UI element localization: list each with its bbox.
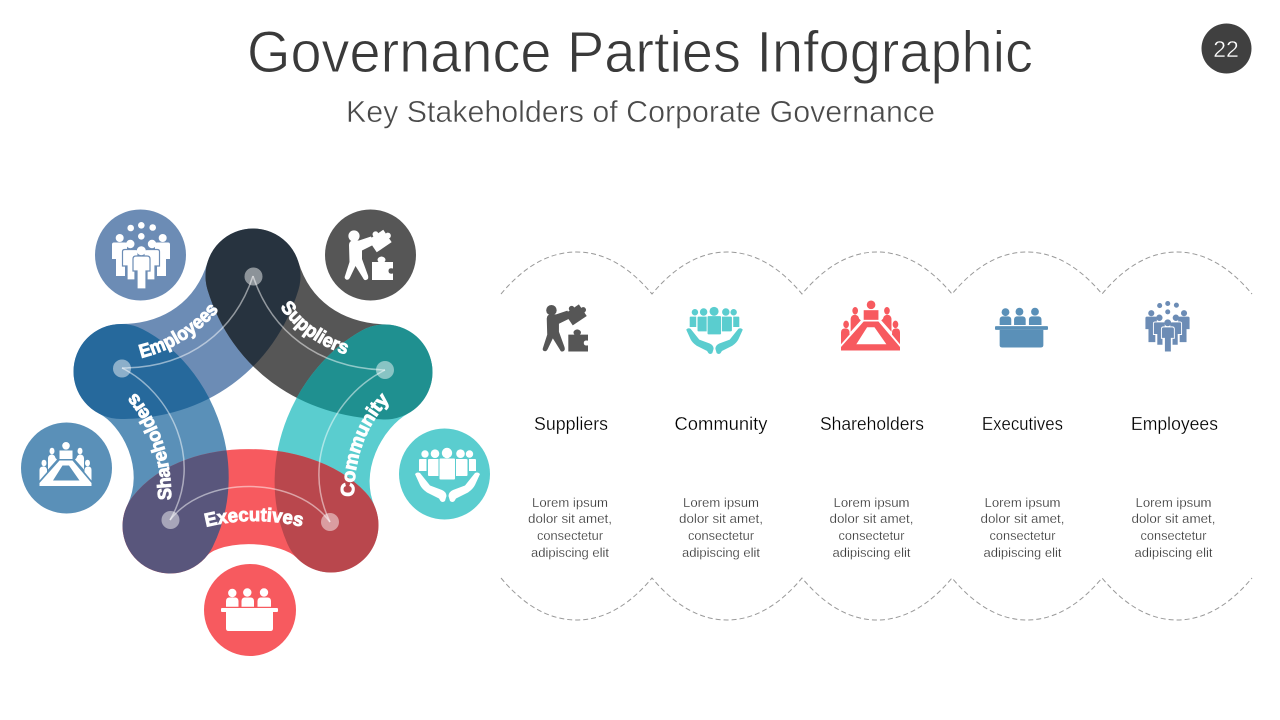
description [1132,495,1216,560]
curved label: Shareholders: Shareholders [128,394,172,500]
subtitle: Key Stakeholders of Corporate Governance [346,94,935,129]
band: employees [121,276,253,372]
icon: meeting table [841,301,900,350]
icon: hands holding people [686,307,743,354]
description: adipiscing elit [531,545,609,560]
description [679,495,763,560]
description: Lorem ipsum [834,495,910,510]
column: executives [980,308,1064,560]
band: executives [170,497,331,526]
overlap: executives and community [322,372,385,525]
description: adipiscing elit [832,545,911,560]
overlap: suppliers and community [322,372,385,525]
description: consectetur [990,528,1056,543]
description: adipiscing elit [984,545,1062,560]
title: Governance Parties Infographic [247,20,1033,85]
curved label: Employees: Employees [138,304,218,358]
curved label: Executives: Executives [204,507,304,528]
page number badge: 22 [1213,36,1239,62]
icon circle: executives [204,564,296,656]
description [528,495,612,560]
curved label: Community: Community [340,392,389,496]
icon circle: community [399,428,490,520]
description [980,495,1064,560]
dashed scalloped frame [501,252,1252,620]
overlap: employees and suppliers [253,276,385,372]
stakeholder five-band diagram [74,228,432,572]
description: consectetur [1140,528,1207,543]
band: shareholders [121,372,181,526]
column: suppliers [528,300,612,560]
description: Lorem ipsum [1136,495,1212,510]
icon: puzzle [543,300,589,352]
description: Lorem ipsum [532,495,608,510]
description [830,495,914,560]
column: community [674,307,768,560]
node dots [113,268,394,531]
description: consectetur [838,528,905,543]
description: dolor sit amet, [1132,511,1216,526]
page number badge [1202,24,1252,74]
description: dolor sit amet, [679,511,763,526]
band: suppliers [253,276,385,372]
band: community [322,372,385,525]
description: consectetur [537,528,604,543]
column: employees [1131,301,1218,560]
description: adipiscing elit [1134,545,1213,560]
icon circle: suppliers [325,210,416,300]
description: dolor sit amet, [980,511,1064,526]
icon circle: employees [95,210,186,300]
heading: Suppliers [534,414,608,434]
overlap: employees and shareholders [121,372,181,526]
connector lines [122,276,385,522]
description: consectetur [688,528,755,543]
icon circle: shareholders [21,422,112,514]
description: Lorem ipsum [683,495,759,510]
icon: executive panel [995,308,1048,347]
description: dolor sit amet, [528,511,612,526]
column: shareholders [820,301,924,560]
heading: Community [674,414,768,434]
heading: Employees [1131,414,1218,434]
icon: employee group [1145,301,1190,352]
description: dolor sit amet, [830,511,914,526]
overlap: executives and shareholders [121,372,181,526]
heading: Shareholders [820,414,924,434]
description: adipiscing elit [682,545,760,560]
curved label: Suppliers: Suppliers [281,300,348,354]
heading: Executives [982,414,1063,434]
description: Lorem ipsum [984,495,1060,510]
